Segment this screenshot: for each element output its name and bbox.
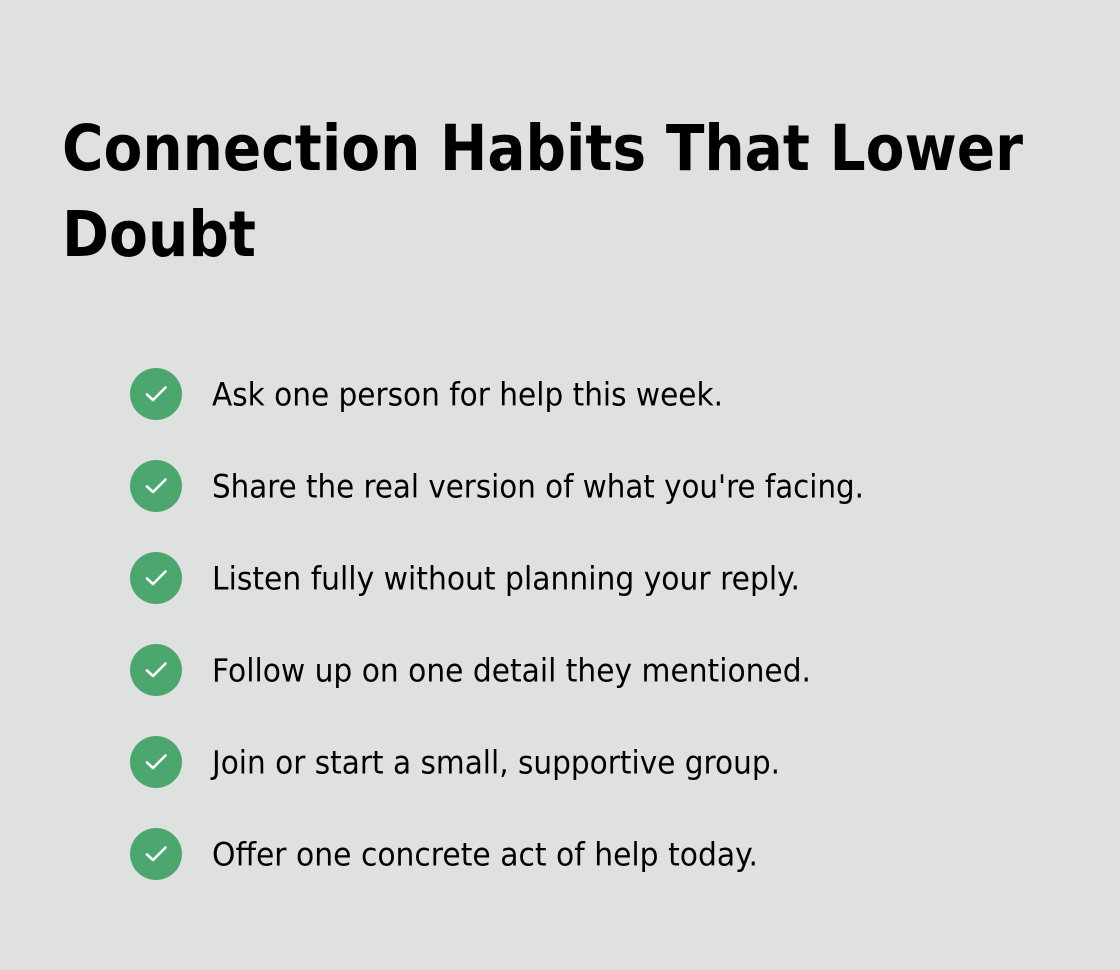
list item: listen fully <box>130 552 800 604</box>
title: Connection Habits That Lower <box>62 112 1023 185</box>
checklist <box>130 368 864 880</box>
list item: ask for help <box>130 368 723 420</box>
list item: listen fully: Listen fully without planning your reply. <box>212 560 800 598</box>
list item: offer help: Offer one concrete act of help today. <box>212 836 758 874</box>
list item: join a group: Join or start a small, supportive group. <box>210 744 780 782</box>
list item: share honestly: Share the real version of what you're facing. <box>212 468 864 506</box>
list item: ask for help: Ask one person for help this week. <box>212 376 723 414</box>
title: Doubt <box>62 198 256 271</box>
title <box>62 112 1023 271</box>
list item: follow up: Follow up on one detail they mentioned. <box>212 652 811 690</box>
list item: share honestly <box>130 460 864 512</box>
list item: offer help <box>130 828 758 880</box>
list item: join a group <box>130 736 780 788</box>
list item: follow up <box>130 644 811 696</box>
